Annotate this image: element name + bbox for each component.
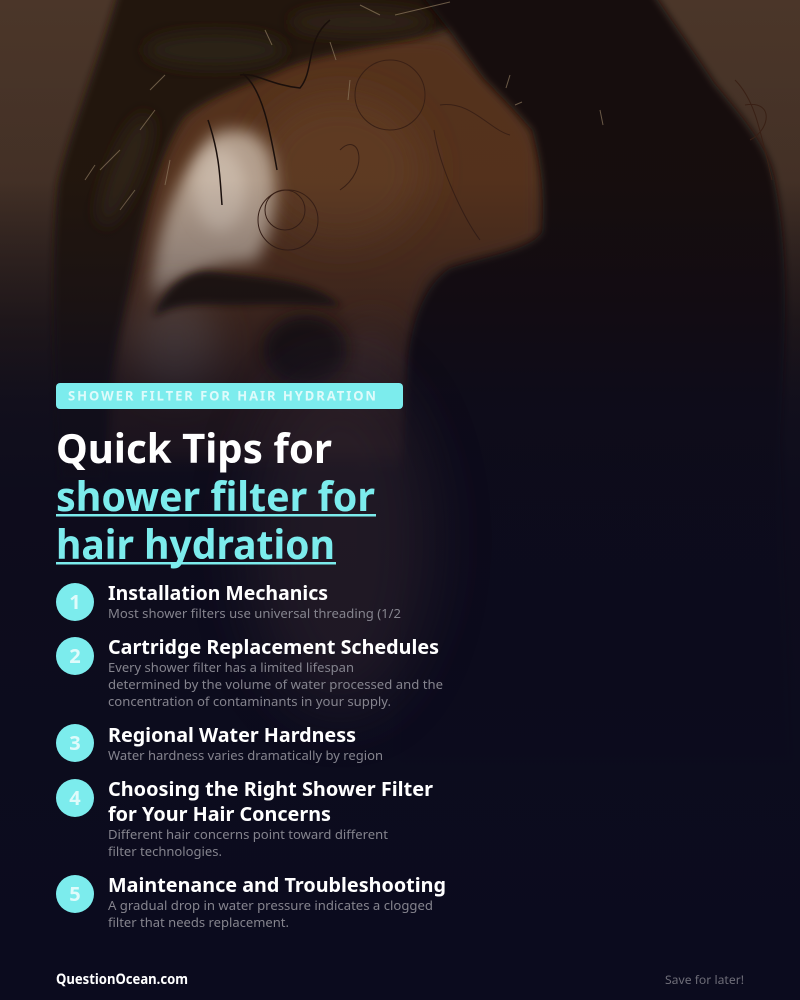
tip 1 [56, 579, 401, 622]
tip 1: Installation Mechanics [108, 579, 328, 606]
tip 2: Every shower filter has a limited lifespan [108, 658, 354, 676]
left hair [54, 0, 480, 480]
footer save note: Save for later! [665, 971, 744, 988]
footer strip [0, 955, 800, 1000]
right hair [400, 0, 790, 760]
tip 5: Maintenance and Troubleshooting [108, 871, 446, 898]
tip 1: 1 [69, 588, 81, 615]
tip 1: Most shower filters use universal threading (1/2 [108, 604, 401, 622]
tip 5: filter that needs replacement. [108, 913, 289, 931]
tip 2: determined by the volume of water processed and the [108, 675, 443, 693]
tip 2 [56, 633, 443, 710]
tip 2: Cartridge Replacement Schedules [108, 633, 439, 660]
tip 5: A gradual drop in water pressure indicates a clogged [108, 896, 433, 914]
wet hair strands [208, 20, 330, 205]
title: hair hydration [56, 516, 335, 571]
tip 4: Different hair concerns point toward different [108, 825, 388, 843]
tip 4: filter technologies. [108, 842, 222, 860]
title: Quick Tips for [56, 420, 332, 475]
title [56, 420, 376, 571]
category badge [56, 383, 403, 409]
eye socket [263, 314, 347, 386]
tip 4 [56, 775, 433, 860]
tip 5 [56, 871, 446, 931]
bright forehead highlight [152, 130, 276, 300]
footer brand: QuestionOcean.com [56, 970, 188, 989]
title: shower filter for [56, 468, 375, 523]
skin base [100, 36, 540, 460]
tip 3 [56, 721, 383, 764]
faint lower face [250, 370, 430, 710]
tip 3: Water hardness varies dramatically by region [108, 746, 383, 764]
tip 2: 2 [69, 642, 81, 669]
tip 4: 4 [69, 784, 81, 811]
category badge: SHOWER FILTER FOR HAIR HYDRATION [68, 386, 376, 404]
tip 4: Choosing the Right Shower Filter [108, 775, 433, 802]
tip 4: for Your Hair Concerns [108, 800, 331, 827]
eyebrow [153, 271, 342, 317]
tip 3: Regional Water Hardness [108, 721, 356, 748]
tip 3: 3 [69, 729, 81, 756]
tip 2: concentration of contaminants in your supply. [108, 692, 391, 710]
tip 5: 5 [69, 880, 81, 907]
